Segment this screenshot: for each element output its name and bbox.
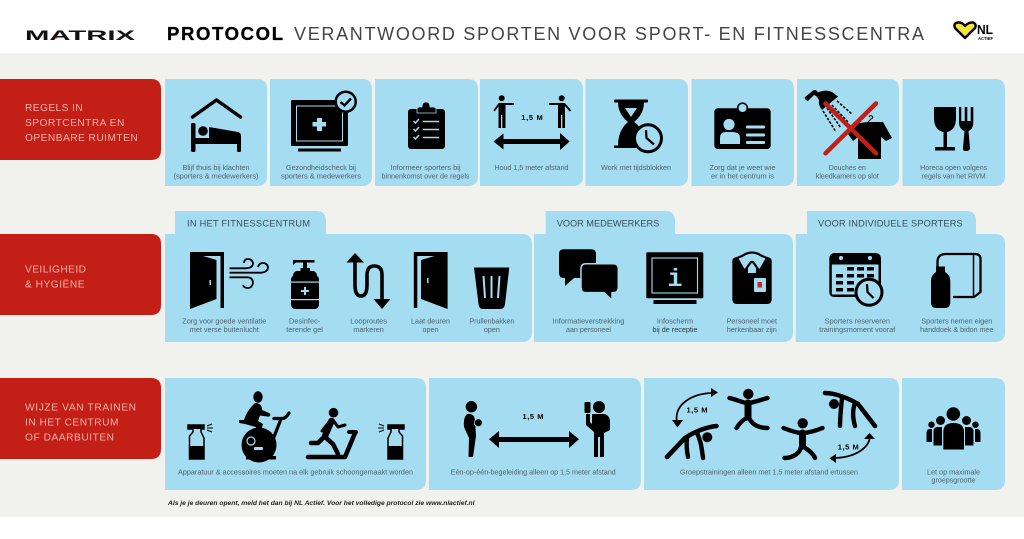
caption: open [484,327,500,334]
icon: ID card [714,103,771,149]
caption: Infoscherm [657,318,693,326]
icon: glass and fork [934,107,973,151]
panel: voor medewerkers [534,211,793,342]
caption [920,165,988,180]
caption: Informatieverstrekking [553,318,624,326]
arrow: bottom curved distance: 1,5 M [838,442,859,452]
section label: regels: OPENBARE RUIMTEN [25,133,138,144]
section label: regels [0,79,161,160]
arrow: top curved distance: 1,5 M [686,406,708,414]
footnote: Als je je deuren opent, meld het dan bij NL Actief. Voor het volledige protocol zie www.nlactief.nl [167,500,475,507]
caption: handdoek & bidon mee [920,327,994,334]
panel: 1,5 meter afstand [480,79,583,186]
caption: terende gel [286,327,323,334]
figure: jumping person bottom [784,418,822,458]
caption [286,318,323,334]
caption: met verse buitenlucht [190,327,259,334]
section label: regels: REGELS IN [25,103,83,114]
icon: trash bin [474,268,509,309]
caption [382,165,470,180]
icon: monitor with check [291,92,356,152]
panel: horeca [902,79,1005,186]
caption: Sporters nemen eigen [921,318,992,326]
icon: open door [414,252,448,309]
panel: informeer sporters [375,79,478,186]
panel: voor individuele sporters [796,211,1005,342]
icon: trainer with phone [584,401,610,457]
caption [727,318,777,334]
caption [174,165,258,180]
icon: polo shirt with badge [732,252,772,304]
caption: (sporters & medewerkers) [174,174,258,180]
caption: Prullenbakken [469,318,514,326]
caption: trainingsmoment vooraf [819,327,895,334]
icon: walking route arrows [346,253,390,309]
icon: runner on treadmill [308,408,356,457]
figure: jumping person top [730,389,768,428]
caption: regels van het RIVM [922,174,986,180]
icon: group of people [926,407,980,450]
arrow: bottom curved distance [830,433,875,463]
caption: sporters & medewerkers [281,174,362,180]
caption: Desinfec- [289,318,321,326]
tab heading: VOOR MEDEWERKERS [557,218,659,228]
caption: Work met tijdsblokken [601,165,671,172]
icon: crossed shower and shirt [804,90,892,159]
panel: douches op slot [797,79,899,186]
panel: groepsgrootte [902,378,1005,490]
icon: exercise bike [239,391,289,462]
caption: Douches en [829,165,866,172]
caption [182,318,266,334]
caption [652,318,698,334]
caption: aan personeel [566,327,611,334]
logo: NL Actief: ACTIEF [978,36,993,41]
icon: spray bottle right [378,424,404,460]
caption: er in het centrum is [711,174,775,180]
caption: Looproutes [350,318,387,326]
section label: wijze van trainen: IN HET CENTRUM [25,418,118,428]
caption: Personeel moet [727,318,777,326]
section label: veiligheid [0,234,161,315]
caption: Groepstrainingen alleen met 1,5 meter afstand ertussen [680,470,858,476]
caption: binnenkomst over de regels [382,174,470,180]
tab heading: IN HET FITNESSCENTRUM [187,218,310,228]
caption: Apparatuur & accessoires moeten na elk gebruik schoongemaakt worden [178,470,413,476]
tab heading: VOOR INDIVIDUELE SPORTERS [818,218,963,228]
caption: open [422,327,439,334]
caption [819,318,895,334]
section label: veiligheid: VEILIGHEID [25,264,86,276]
panel: groepstrainingen [644,378,899,490]
icon: bed under roof [191,100,241,152]
distance label: 1,5 M [522,412,544,421]
caption [553,318,624,334]
section label: veiligheid: & HYGIËNE [25,278,85,290]
logo: Matrix: MATRIX [25,27,136,43]
panel: blijf thuis [165,79,267,186]
caption [920,318,994,334]
panel: in het fitnesscentrum [165,211,532,342]
section label: wijze van trainen: OF DAARBUITEN [25,432,114,444]
icon: info screen: i [667,265,683,294]
caption [469,318,514,334]
caption: Gezondheidscheck bij [286,165,356,172]
caption: Houd 1,5 meter afstand [494,165,569,172]
icon: hourglass with clock [614,100,662,152]
panel: weet wie er is [692,79,794,186]
icon: trainee with weight [464,401,482,457]
caption: Zorg dat je weet wie [710,165,776,172]
arrow: top curved distance [672,388,718,428]
caption [710,165,776,180]
section label: wijze van trainen: WIJZE VAN TRAINEN [25,402,136,414]
caption [350,318,387,334]
caption: Eén-op-één-begeleiding alleen op 1,5 meter afstand [451,470,616,476]
icon: two people with distance arrow: 1,5 M [521,113,543,122]
caption: bij de receptie [652,327,698,334]
icon: door with wind [190,252,268,309]
panel: gezondheidscheck [270,79,372,186]
caption: herkenbaar zijn [727,327,777,334]
caption [281,165,362,180]
arrow: distance [489,431,579,448]
panel: tijdsblokken [586,79,688,186]
caption: groepsgrootte [932,478,976,484]
caption: Let op maximale [927,470,980,476]
panel: apparatuur schoonmaken [165,378,426,490]
icon: calendar with clock [829,253,882,305]
caption: kleedkamers op slot [816,174,879,180]
caption: Laat deuren [411,318,450,326]
icon: spray bottle left [188,424,213,460]
panel: een-op-een begeleiding [429,378,641,490]
icon: info screen [646,252,703,304]
figure: stretching person bottom left [667,426,716,458]
icon: disinfectant gel [291,260,319,309]
caption: Informeer sporters bij [390,165,461,172]
caption [927,470,980,484]
logo: NL Actief [954,22,993,41]
caption: markeren [353,327,384,334]
logo: NL Actief: NL [977,22,993,37]
caption: Sporters reserveren [825,318,890,326]
figure: stretching person top right [825,393,875,426]
icon: bottle and towel [931,254,980,308]
icon: speech bubbles [559,249,618,300]
caption [411,318,450,334]
caption: Blijf thuis bij klachten [182,165,250,172]
section label: regels: SPORTCENTRA EN [25,118,124,129]
caption: Horeca open volgens [920,165,988,172]
section label: wijze van trainen [0,378,161,459]
title: PROTOCOL [167,23,283,44]
caption [816,165,879,180]
logo: Matrix [25,27,136,43]
title: VERANTWOORD SPORTEN VOOR SPORT- EN FITNESSCENTRA [294,24,924,44]
icon: clipboard [408,102,445,149]
caption: Zorg voor goede ventilatie [182,318,266,326]
